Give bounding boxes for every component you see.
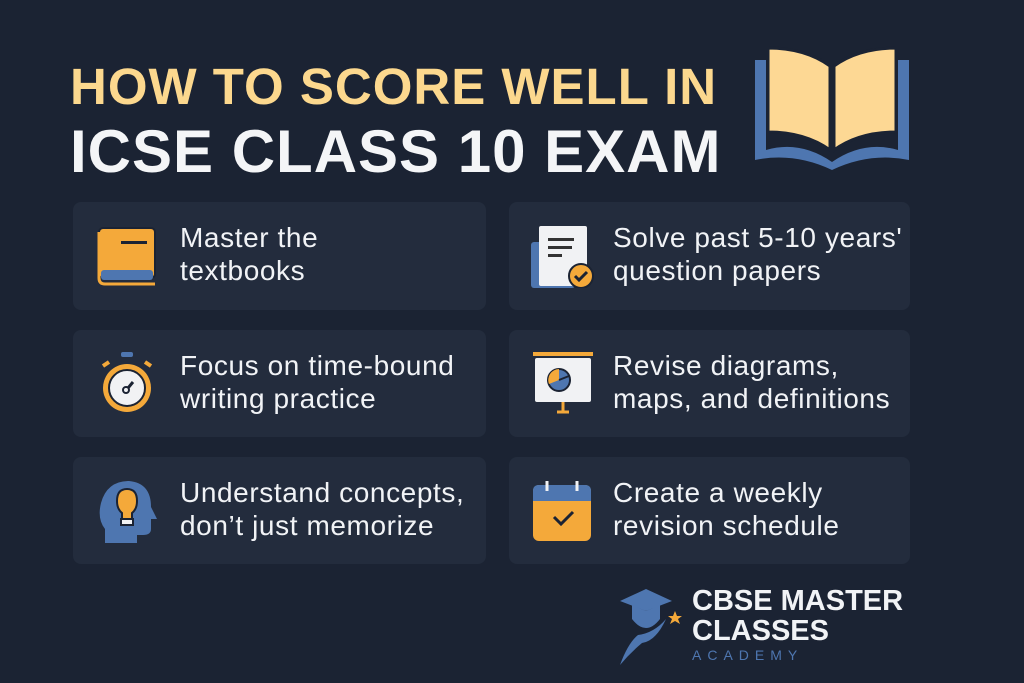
card: revise diagrams: maps, and definitions	[613, 383, 890, 414]
card: time-bound writing: Focus on time-bound	[180, 350, 454, 381]
card: master textbooks	[73, 202, 486, 310]
card: understand concepts: don’t just memorize	[180, 510, 434, 541]
logo: CBSE Master Classes: ACADEMY	[692, 647, 803, 663]
card: understand concepts	[73, 457, 486, 564]
card: master textbooks: Master the	[180, 222, 318, 253]
icon: book	[98, 227, 156, 286]
card: weekly schedule	[509, 457, 910, 564]
card: weekly schedule: Create a weekly	[613, 477, 823, 508]
logo: CBSE Master Classes: CBSE MASTER	[692, 585, 903, 617]
icon: stopwatch	[102, 352, 152, 412]
card: past papers: question papers	[613, 255, 821, 286]
card: understand concepts: Understand concepts,	[180, 477, 464, 508]
icon: paper with check	[531, 226, 594, 288]
card: past papers	[509, 202, 910, 310]
icon: open book	[755, 50, 909, 170]
card: time-bound writing	[73, 330, 486, 437]
icon: calendar	[533, 481, 591, 541]
icon: head with bulb	[100, 481, 157, 543]
icon: graduate with star	[620, 589, 682, 665]
card: master textbooks: textbooks	[180, 255, 305, 286]
card: weekly schedule: revision schedule	[613, 510, 840, 541]
card: past papers: Solve past 5-10 years'	[613, 222, 902, 253]
logo: CBSE Master Classes: CLASSES	[692, 615, 829, 647]
card: revise diagrams: Revise diagrams,	[613, 350, 839, 381]
card: revise diagrams	[509, 330, 910, 437]
title line 2: ICSE CLASS 10 EXAM	[70, 118, 722, 185]
title line 1: HOW TO SCORE WELL IN	[70, 58, 717, 115]
logo: CBSE Master Classes	[620, 585, 903, 665]
card: time-bound writing: writing practice	[180, 383, 376, 414]
icon: presentation board	[533, 352, 593, 414]
